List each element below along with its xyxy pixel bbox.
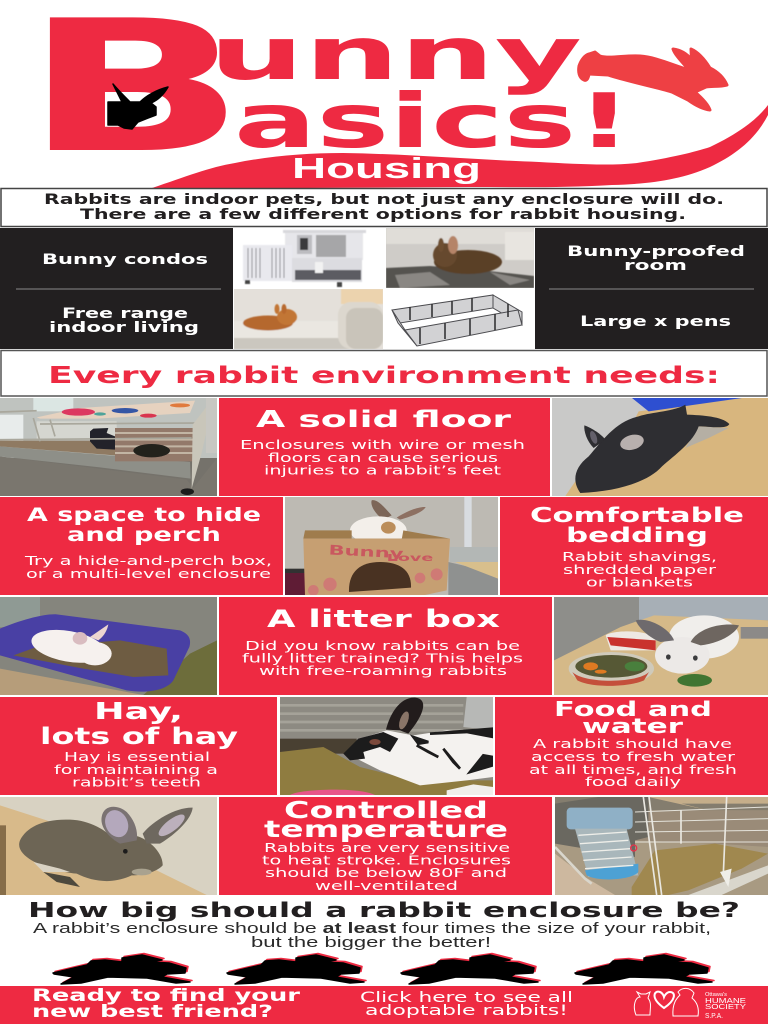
panel: Food and water: Food and: [554, 697, 712, 721]
logo: humane society: S.P.A.: [705, 1011, 723, 1020]
title word unny: unny: [209, 12, 582, 97]
icon: running rabbit 3: [401, 954, 540, 984]
panel: Hay, lots of hay: rabbit’s teeth: [72, 774, 201, 790]
panel: Controlled temperature: well-ventilated: [315, 878, 458, 893]
panel: Food and water: at all times, and fresh: [529, 762, 737, 777]
panel: Comfortable bedding: Comfortable: [530, 503, 744, 527]
panel: Controlled temperature: to heat stroke. Enclosures: [262, 852, 511, 868]
right dark panel: [535, 228, 768, 349]
logo: humane society: HUMANE: [705, 996, 746, 1005]
panel: Food and water: water: [582, 714, 683, 738]
left dark panel: Free range: [62, 306, 188, 322]
photo: rabbit with food bowl: [554, 597, 768, 695]
photo: bunny condo: [243, 230, 366, 288]
footer call to action: [360, 990, 573, 1019]
panel: A litter box: fully litter trained? This helps: [242, 650, 523, 666]
heading: How big should a rabbit enclosure be: How big should a rabbit enclosure be?: [28, 898, 740, 922]
photo: rabbit on cardboard box: [285, 497, 498, 596]
footer call to action: Click here to see all: [360, 990, 573, 1006]
panel: Hay, lots of hay: for maintaining a: [54, 762, 218, 777]
photo: black and white rabbit in hay: [280, 697, 493, 795]
panel: Comfortable bedding: [500, 497, 768, 595]
panel: A litter box: Did you know rabbits can be: [245, 638, 520, 653]
panel: Controlled temperature: should be below 80F and: [265, 865, 507, 880]
panel: A space to hide and perch: A space to hide: [27, 504, 261, 526]
icon: running rabbit 2: [227, 954, 366, 984]
left dark panel: [0, 228, 233, 349]
panel: Comfortable bedding: bedding: [566, 523, 708, 547]
photo: bunny on sofa: [234, 289, 383, 349]
panel: A litter box: with free-roaming rabbits: [259, 663, 507, 678]
panel: Controlled temperature: temperature: [264, 817, 508, 843]
photo: water bottle in cage: [555, 797, 768, 895]
text block: enclosure size: A rabbit’s enclosure should be at least four times the size of your rabbit,: [33, 920, 711, 937]
panel: A solid floor: Enclosures with wire or mesh: [240, 437, 525, 452]
photo: black rabbit on shavings: [552, 398, 768, 496]
panel: Controlled temperature: Rabbits are very sensitive: [264, 840, 510, 855]
panel: Food and water: food daily: [585, 774, 682, 789]
icon: black rabbit in B: [108, 84, 168, 129]
left dark panel: indoor living: [49, 320, 199, 336]
panel: Food and water: A rabbit should have: [533, 736, 732, 751]
photo: grey rabbit: [0, 797, 217, 895]
panel: Hay, lots of hay: [0, 697, 277, 795]
footer heading: [32, 986, 301, 1022]
icon row: four running rabbits: [53, 954, 714, 984]
footer call to action: adoptable rabbits!: [365, 1003, 568, 1019]
intro text box: [1, 188, 767, 226]
panel: A solid floor: injuries to a rabbit’s feet: [264, 462, 501, 478]
logo: humane society: [634, 988, 746, 1020]
right dark panel: room: [624, 258, 687, 274]
swoosh banner: [152, 105, 768, 189]
panel: A litter box: [219, 597, 552, 695]
heading box: Every rabbit environment needs: [1, 350, 767, 396]
icon: running rabbit 1: [53, 954, 192, 984]
panel: A space to hide and perch: and perch: [67, 524, 221, 546]
footer band: [0, 986, 768, 1024]
photo: rabbit in litter box: [0, 597, 217, 695]
logo: humane society: SOCIETY: [705, 1002, 746, 1011]
panel: Food and water: access to fresh water: [531, 749, 736, 764]
panel: Comfortable bedding: or blankets: [586, 574, 693, 590]
panel: A solid floor: A solid floor: [256, 407, 512, 433]
panel: Food and water: [495, 697, 768, 795]
photo: rabbit on cardboard box: Bunny: [328, 543, 404, 562]
photo: rabbit on cardboard box: Love: [387, 553, 433, 564]
right dark panel: Large x pens: [580, 314, 731, 330]
footer heading: Ready to find your: [32, 986, 301, 1006]
intro text box: Rabbits are indoor pets, but not just any enclosure will do.: [44, 192, 724, 208]
photo: cage with solid floor: [0, 398, 217, 496]
panel: Hay, lots of hay: Hay is essential: [64, 749, 210, 764]
panel: Controlled temperature: [219, 797, 552, 895]
panel: A space to hide and perch: or a multi-level enclosure: [26, 566, 271, 581]
panel: A space to hide and perch: [0, 497, 283, 595]
title: Bunny Basics!: [23, 0, 768, 193]
panel: Controlled temperature: Controlled: [284, 798, 488, 824]
footer heading: new best friend?: [32, 1002, 273, 1022]
photo: x pen: [384, 289, 534, 349]
intro text box: There are a few different options for rabbit housing.: [80, 207, 686, 223]
text block: enclosure size: but the bigger the better!: [251, 934, 491, 951]
panel: A solid floor: floors can cause serious: [268, 450, 498, 465]
icon: running rabbit 4: [575, 954, 714, 984]
panel: housing options: [0, 228, 768, 349]
subtitle: Housing: Housing: [292, 153, 481, 185]
panel: Comfortable bedding: Rabbit shavings,: [562, 549, 717, 564]
panel: Hay, lots of hay: Hay,: [94, 699, 183, 725]
heading box: Every rabbit environment needs: Every rabbit environment needs:: [48, 363, 720, 389]
left dark panel: Bunny condos: [42, 252, 208, 268]
photo: bunny on blanket: [386, 228, 534, 288]
right dark panel: Bunny-proofed: [567, 244, 745, 260]
icon: red leaping rabbit: [579, 49, 727, 110]
panel: Comfortable bedding: shredded paper: [563, 562, 717, 577]
panel: A space to hide and perch: Try a hide-and-perch box,: [23, 553, 272, 568]
panel: Hay, lots of hay: lots of hay: [40, 724, 238, 750]
logo: humane society: Ottawa's: [705, 992, 728, 998]
panel: A litter box: A litter box: [267, 605, 501, 633]
title word asics: asics!: [234, 77, 632, 165]
panel: A solid floor: [219, 398, 550, 496]
text block: enclosure size: [33, 920, 711, 951]
